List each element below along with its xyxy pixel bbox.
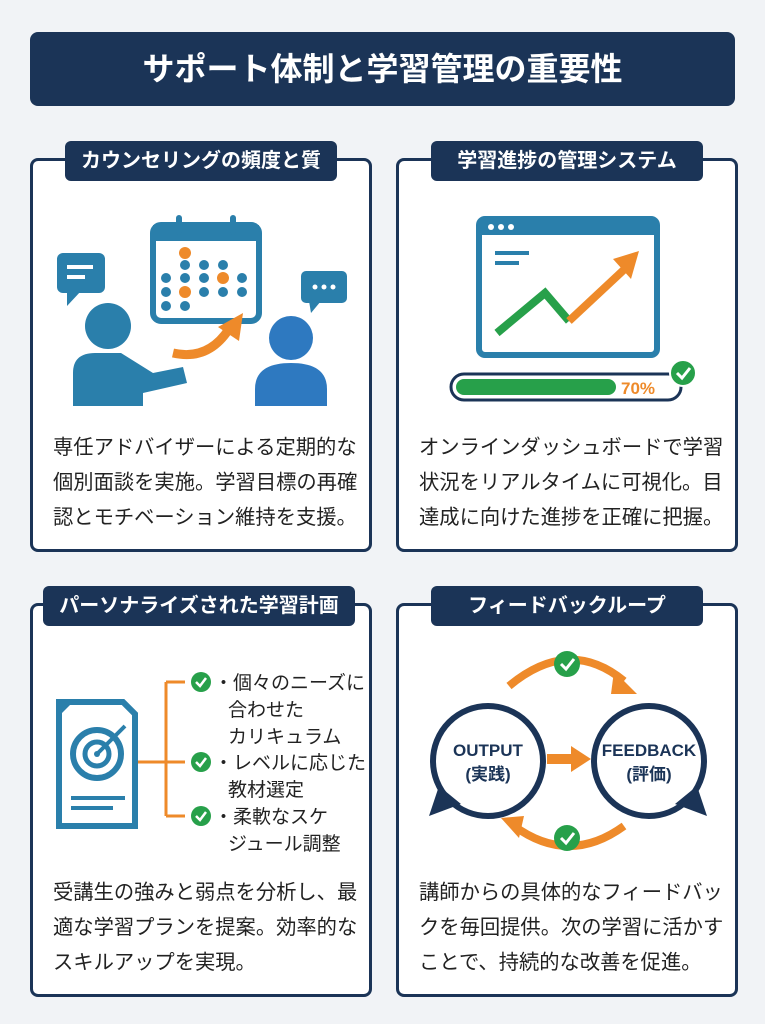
text: counseling: 専任アドバイザーによる定期的な <box>53 437 357 459</box>
icon: feedback loop: (評価) <box>626 765 672 784</box>
text: feedback <box>419 882 723 974</box>
icon: plan target with list: 合わせた <box>228 699 304 721</box>
panel: counseling <box>30 158 372 552</box>
tab: counseling: カウンセリングの頻度と質 <box>81 150 321 172</box>
icon: plan target with list: ・レベルに応じた <box>214 752 366 774</box>
text: counseling: 認とモチベーション維持を支援。 <box>53 507 357 529</box>
text: feedback: ことで、持続的な改善を促進。 <box>419 952 702 974</box>
icon: plan target with list: ジュール調整 <box>228 833 341 855</box>
icon: feedback loop <box>429 651 707 851</box>
title: サポート体制と学習管理の重要性 <box>142 51 622 87</box>
text: feedback: 講師からの具体的なフィードバッ <box>419 882 723 904</box>
icon: counseling illustration <box>57 215 347 406</box>
tab: plan <box>43 586 355 626</box>
text: plan: スキルアップを実現。 <box>53 952 256 974</box>
text: plan: 受講生の強みと弱点を分析し、最 <box>53 882 357 904</box>
text: progress <box>419 436 723 529</box>
tab: counseling <box>65 141 337 181</box>
icon: plan target with list: ・個々のニーズに <box>214 672 365 694</box>
text: counseling: 個別面談を実施。学習目標の再確 <box>53 472 357 494</box>
icon: plan target with list: ・柔軟なスケ <box>214 806 328 828</box>
text: progress: 達成に向けた進捗を正確に把握。 <box>419 507 723 529</box>
icon: plan target with list: 教材選定 <box>228 779 304 801</box>
icon: feedback loop: OUTPUT <box>453 741 524 760</box>
panel: plan <box>30 603 372 997</box>
icon: plan target with list <box>56 672 366 855</box>
icon: dashboard <box>450 216 695 402</box>
icon: plan target with list: カリキュラム <box>228 727 341 748</box>
tab: progress <box>431 141 703 181</box>
text: plan <box>53 882 357 974</box>
text: counseling <box>53 436 357 529</box>
text: progress: 状況をリアルタイムに可視化。目 <box>419 472 723 494</box>
icon: feedback loop: (実践) <box>465 765 511 784</box>
title <box>30 32 735 106</box>
tab: progress: 学習進捗の管理システム <box>457 150 677 172</box>
tab: feedback: フィードバックループ <box>468 595 666 617</box>
tab: plan: パーソナライズされた学習計画 <box>59 595 339 617</box>
tab: feedback <box>431 586 703 626</box>
panel: feedback <box>396 603 738 997</box>
text: plan: 適な学習プランを提案。効率的な <box>53 917 357 939</box>
text: progress: オンラインダッシュボードで学習 <box>419 437 723 459</box>
panel: progress <box>396 158 738 552</box>
text: feedback: クを毎回提供。次の学習に活かす <box>419 917 723 939</box>
icon: feedback loop: FEEDBACK <box>602 741 697 760</box>
icon: dashboard: 70% <box>621 379 655 398</box>
